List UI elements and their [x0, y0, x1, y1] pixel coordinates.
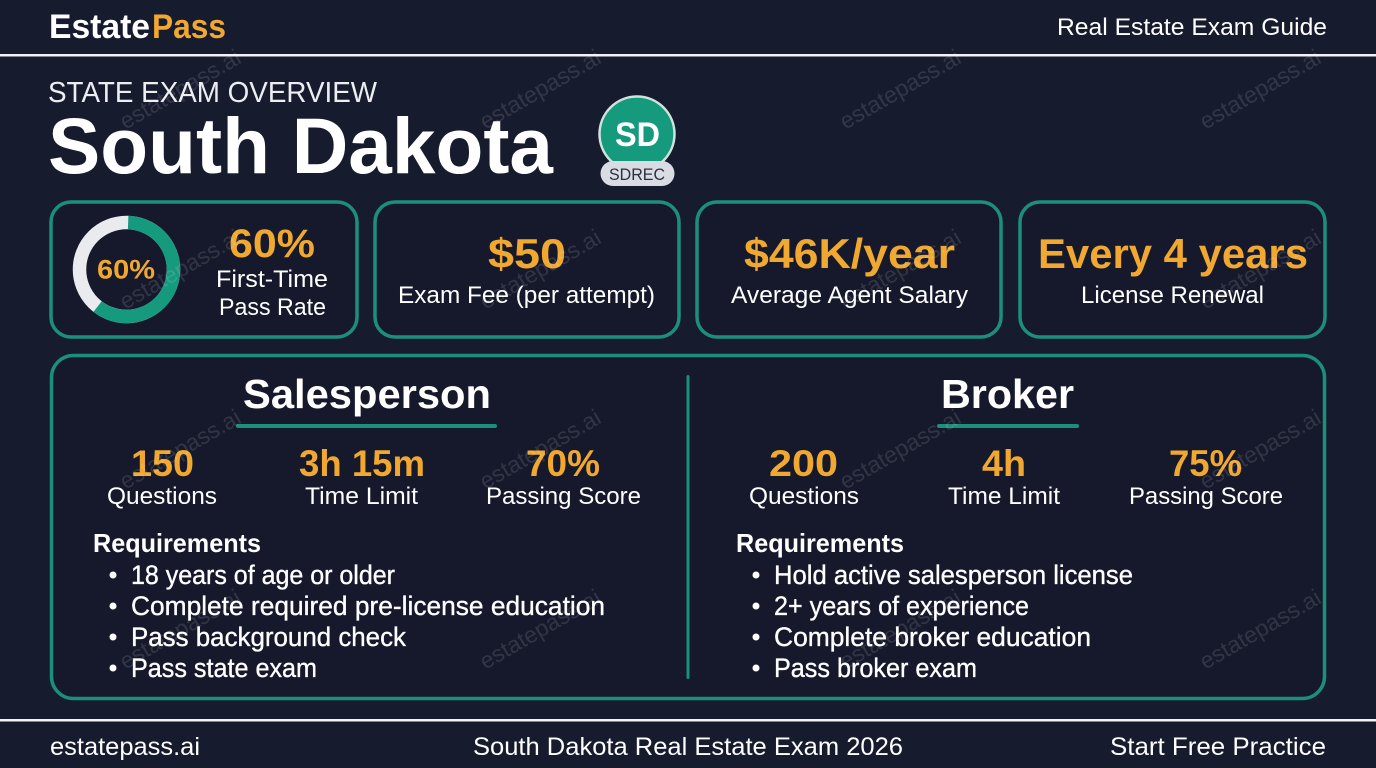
watermarks: estatepass.ai — [475, 224, 605, 314]
watermarks — [115, 44, 1325, 674]
stat: time limit: 3h 15m — [299, 443, 425, 484]
card: exam fee: $50 — [488, 230, 566, 277]
stat: passing score — [486, 443, 641, 510]
stat: questions: Questions — [749, 483, 859, 510]
watermarks: estatepass.ai — [1195, 404, 1325, 494]
watermarks: estatepass.ai — [475, 584, 605, 674]
logo: Estate — [49, 8, 150, 46]
stat: time limit — [299, 443, 425, 510]
stat: questions: 200 — [769, 443, 838, 484]
watermarks: estatepass.ai — [475, 404, 605, 494]
card: exam fee: Exam Fee (per attempt) — [398, 282, 655, 309]
panel: license comparison — [52, 356, 1324, 698]
card: first-time pass rate: Pass Rate — [219, 294, 326, 321]
watermarks: estatepass.ai — [835, 404, 965, 494]
donut chart: 60%: 60% — [97, 254, 155, 284]
footer bar: South Dakota Real Estate Exam 2026 — [473, 733, 903, 761]
requirements list: Pass state exam — [131, 653, 317, 683]
watermarks: estatepass.ai — [835, 584, 965, 674]
requirements list: Complete broker education — [774, 622, 1091, 652]
stat: passing score: Passing Score — [486, 483, 641, 510]
donut chart: 60% — [78, 221, 175, 318]
stat: questions: 150 — [131, 443, 194, 484]
card: first-time pass rate: 60% — [229, 222, 315, 266]
footer bar: estatepass.ai — [50, 733, 200, 761]
requirements list: Requirements — [93, 528, 261, 558]
card: first-time pass rate: First-Time — [216, 266, 328, 293]
card: license renewal — [1020, 202, 1325, 337]
watermarks: estatepass.ai — [1195, 44, 1325, 134]
stat: time limit: Time Limit — [948, 483, 1060, 510]
state badge: SD — [615, 116, 660, 154]
requirements list: Complete required pre-license education — [131, 591, 605, 621]
card: license renewal: License Renewal — [1081, 282, 1264, 309]
requirements list: Requirements — [736, 528, 904, 558]
heading: Broker — [941, 371, 1074, 417]
stat: time limit — [948, 443, 1060, 510]
watermarks: estatepass.ai — [1195, 584, 1325, 674]
watermarks: estatepass.ai — [115, 584, 245, 674]
logo — [49, 8, 226, 46]
watermarks: estatepass.ai — [115, 404, 245, 494]
footer bar — [50, 733, 1326, 761]
card: average salary — [697, 202, 1001, 337]
guide label: Real Estate Exam Guide — [1057, 14, 1327, 41]
watermarks: estatepass.ai — [475, 44, 605, 134]
watermarks: estatepass.ai — [115, 44, 245, 134]
stat: questions: Questions — [107, 483, 217, 510]
watermarks: estatepass.ai — [835, 44, 965, 134]
requirements list — [736, 528, 1133, 683]
stat: passing score: Passing Score — [1129, 483, 1283, 510]
logo: Pass — [152, 8, 226, 46]
requirements list: Pass background check — [131, 622, 406, 652]
state badge — [600, 96, 674, 186]
watermarks: estatepass.ai — [1195, 224, 1325, 314]
state name: South Dakota — [48, 101, 554, 190]
stat: passing score: 70% — [526, 443, 600, 484]
requirements list — [93, 528, 605, 683]
stat: questions — [749, 443, 859, 510]
stat: passing score: 75% — [1169, 443, 1242, 484]
heading: Salesperson — [243, 371, 491, 417]
requirements list: 2+ years of experience — [774, 591, 1029, 621]
column: broker — [736, 371, 1283, 683]
column: salesperson — [93, 371, 641, 683]
card: exam fee — [375, 202, 679, 337]
stat: time limit: 4h — [982, 443, 1026, 484]
watermarks: estatepass.ai — [835, 224, 965, 314]
stat: time limit: Time Limit — [305, 483, 418, 510]
requirements list: Hold active salesperson license — [774, 560, 1133, 590]
requirements list: Pass broker exam — [774, 653, 977, 683]
card: average salary: Average Agent Salary — [731, 282, 968, 309]
card: first-time pass rate — [51, 202, 357, 337]
footer bar: Start Free Practice — [1110, 733, 1326, 761]
card: license renewal: Every 4 years — [1038, 230, 1308, 277]
watermarks: estatepass.ai — [115, 224, 245, 314]
stat: questions — [107, 443, 217, 510]
card: average salary: $46K/year — [744, 230, 955, 277]
requirements list: 18 years of age or older — [131, 560, 395, 590]
header bar — [49, 8, 1327, 46]
title block — [48, 77, 554, 190]
eyebrow heading: STATE EXAM OVERVIEW — [48, 77, 378, 109]
state badge: SDREC — [609, 165, 665, 184]
stat: passing score — [1129, 443, 1283, 510]
